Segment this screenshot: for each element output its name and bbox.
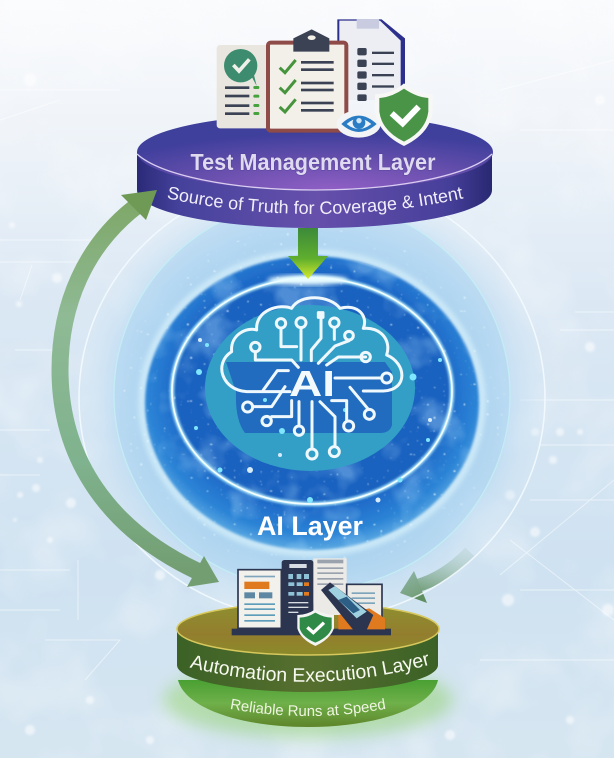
disc top face — [137, 114, 493, 190]
panel: automation execution layer disc — [156, 558, 460, 747]
base — [232, 629, 391, 635]
disc side — [177, 629, 438, 692]
server panel — [282, 560, 313, 630]
circuit traces — [253, 317, 382, 448]
tool — [321, 582, 373, 630]
glowing ring — [172, 278, 452, 504]
heading: AI Layer: AI Layer — [257, 511, 363, 541]
shield — [297, 609, 334, 646]
subheading: reliable runs: Reliable Runs at Speed — [230, 698, 386, 716]
back document — [337, 19, 405, 101]
orange block — [338, 608, 385, 629]
green glow — [163, 662, 453, 738]
icon: automation documents — [232, 558, 391, 646]
disc side — [137, 152, 492, 228]
subheading: source of truth: Source of Truth for Coverage & Intent — [168, 187, 464, 214]
glow particles — [194, 338, 442, 503]
panel: AI layer — [78, 176, 546, 620]
teal inner ellipse — [205, 305, 415, 471]
dark cloud fill — [226, 362, 392, 433]
arrow: right return arrow — [400, 552, 470, 603]
clipboard — [268, 29, 346, 131]
left card — [217, 45, 273, 128]
arrow: left feedback arc — [60, 190, 219, 587]
disc top face — [177, 603, 439, 655]
heading: automation execution layer: Automation Execution Layer — [190, 654, 428, 682]
left doc — [238, 570, 281, 628]
sparkle field — [116, 228, 508, 568]
heading: Test Management Layer: Test Management Layer — [190, 149, 436, 175]
lower band — [178, 680, 438, 727]
label: AI: AI — [289, 363, 335, 404]
icon: eye — [337, 110, 381, 138]
icon: AI brain cloud — [222, 298, 402, 459]
outer halo rings — [78, 176, 546, 620]
cloud outline — [222, 298, 402, 392]
blue disc — [145, 256, 479, 550]
icon: documents — [217, 19, 433, 146]
small doc — [347, 584, 382, 619]
back doc — [313, 558, 347, 615]
arrow: down to AI layer — [268, 228, 348, 285]
panel: test management layer disc — [136, 19, 493, 228]
icon: shield — [375, 83, 433, 146]
